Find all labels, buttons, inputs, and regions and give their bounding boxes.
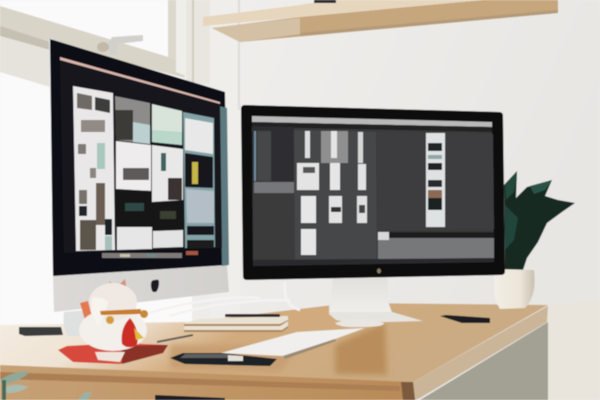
thumbnail column 3 — [152, 104, 183, 248]
keyboard reflection on desk — [170, 345, 300, 372]
iMac screen — [60, 57, 222, 253]
wooden shelf — [203, 0, 558, 42]
phone on right of desk — [440, 315, 490, 323]
thumbnail column 2 — [115, 96, 152, 250]
preview panel — [377, 132, 494, 230]
info panel — [378, 232, 494, 260]
bib — [122, 318, 138, 347]
foreground plant leaves — [0, 372, 92, 400]
body — [79, 309, 147, 351]
cushion — [58, 343, 168, 364]
lucky cat figurine — [58, 279, 168, 364]
apple logo — [377, 268, 381, 274]
desk front edge — [0, 365, 415, 400]
desk side edge — [413, 306, 548, 400]
thumbnail column 4 — [183, 112, 215, 248]
screen bottom bar — [253, 258, 494, 266]
right monitor — [241, 105, 505, 323]
plant — [504, 171, 575, 270]
stand neck — [330, 278, 391, 312]
window latch — [97, 35, 143, 55]
window — [0, 0, 240, 330]
collar — [100, 309, 141, 315]
thumbnail column 1 — [73, 86, 115, 251]
iMac bezel — [50, 39, 227, 276]
iMac dock — [102, 251, 198, 258]
phone in front of keyboard — [170, 353, 277, 366]
cable on desk — [150, 282, 300, 316]
side ribbon — [80, 301, 92, 320]
file browser panel — [294, 130, 377, 261]
stand base — [329, 304, 423, 323]
pen — [225, 314, 280, 317]
notebook — [184, 316, 288, 332]
plant pot — [494, 269, 535, 309]
raised arm — [92, 298, 108, 326]
iMac chin — [53, 265, 229, 312]
head — [89, 283, 137, 321]
left iMac — [49, 38, 229, 336]
hard drive box — [19, 327, 63, 336]
iMac side edge — [49, 38, 56, 312]
monitor bezel — [241, 105, 505, 280]
iMac stand — [64, 310, 88, 336]
left panel — [253, 126, 294, 193]
keyboard — [221, 328, 365, 359]
ears — [104, 281, 117, 292]
desk top — [0, 303, 548, 382]
screen — [252, 116, 494, 266]
space under desk — [420, 322, 548, 400]
iMac apple logo — [151, 277, 159, 292]
monitor reflection on desk — [335, 322, 387, 375]
mouse — [335, 320, 384, 327]
pen under cushion — [157, 334, 193, 343]
